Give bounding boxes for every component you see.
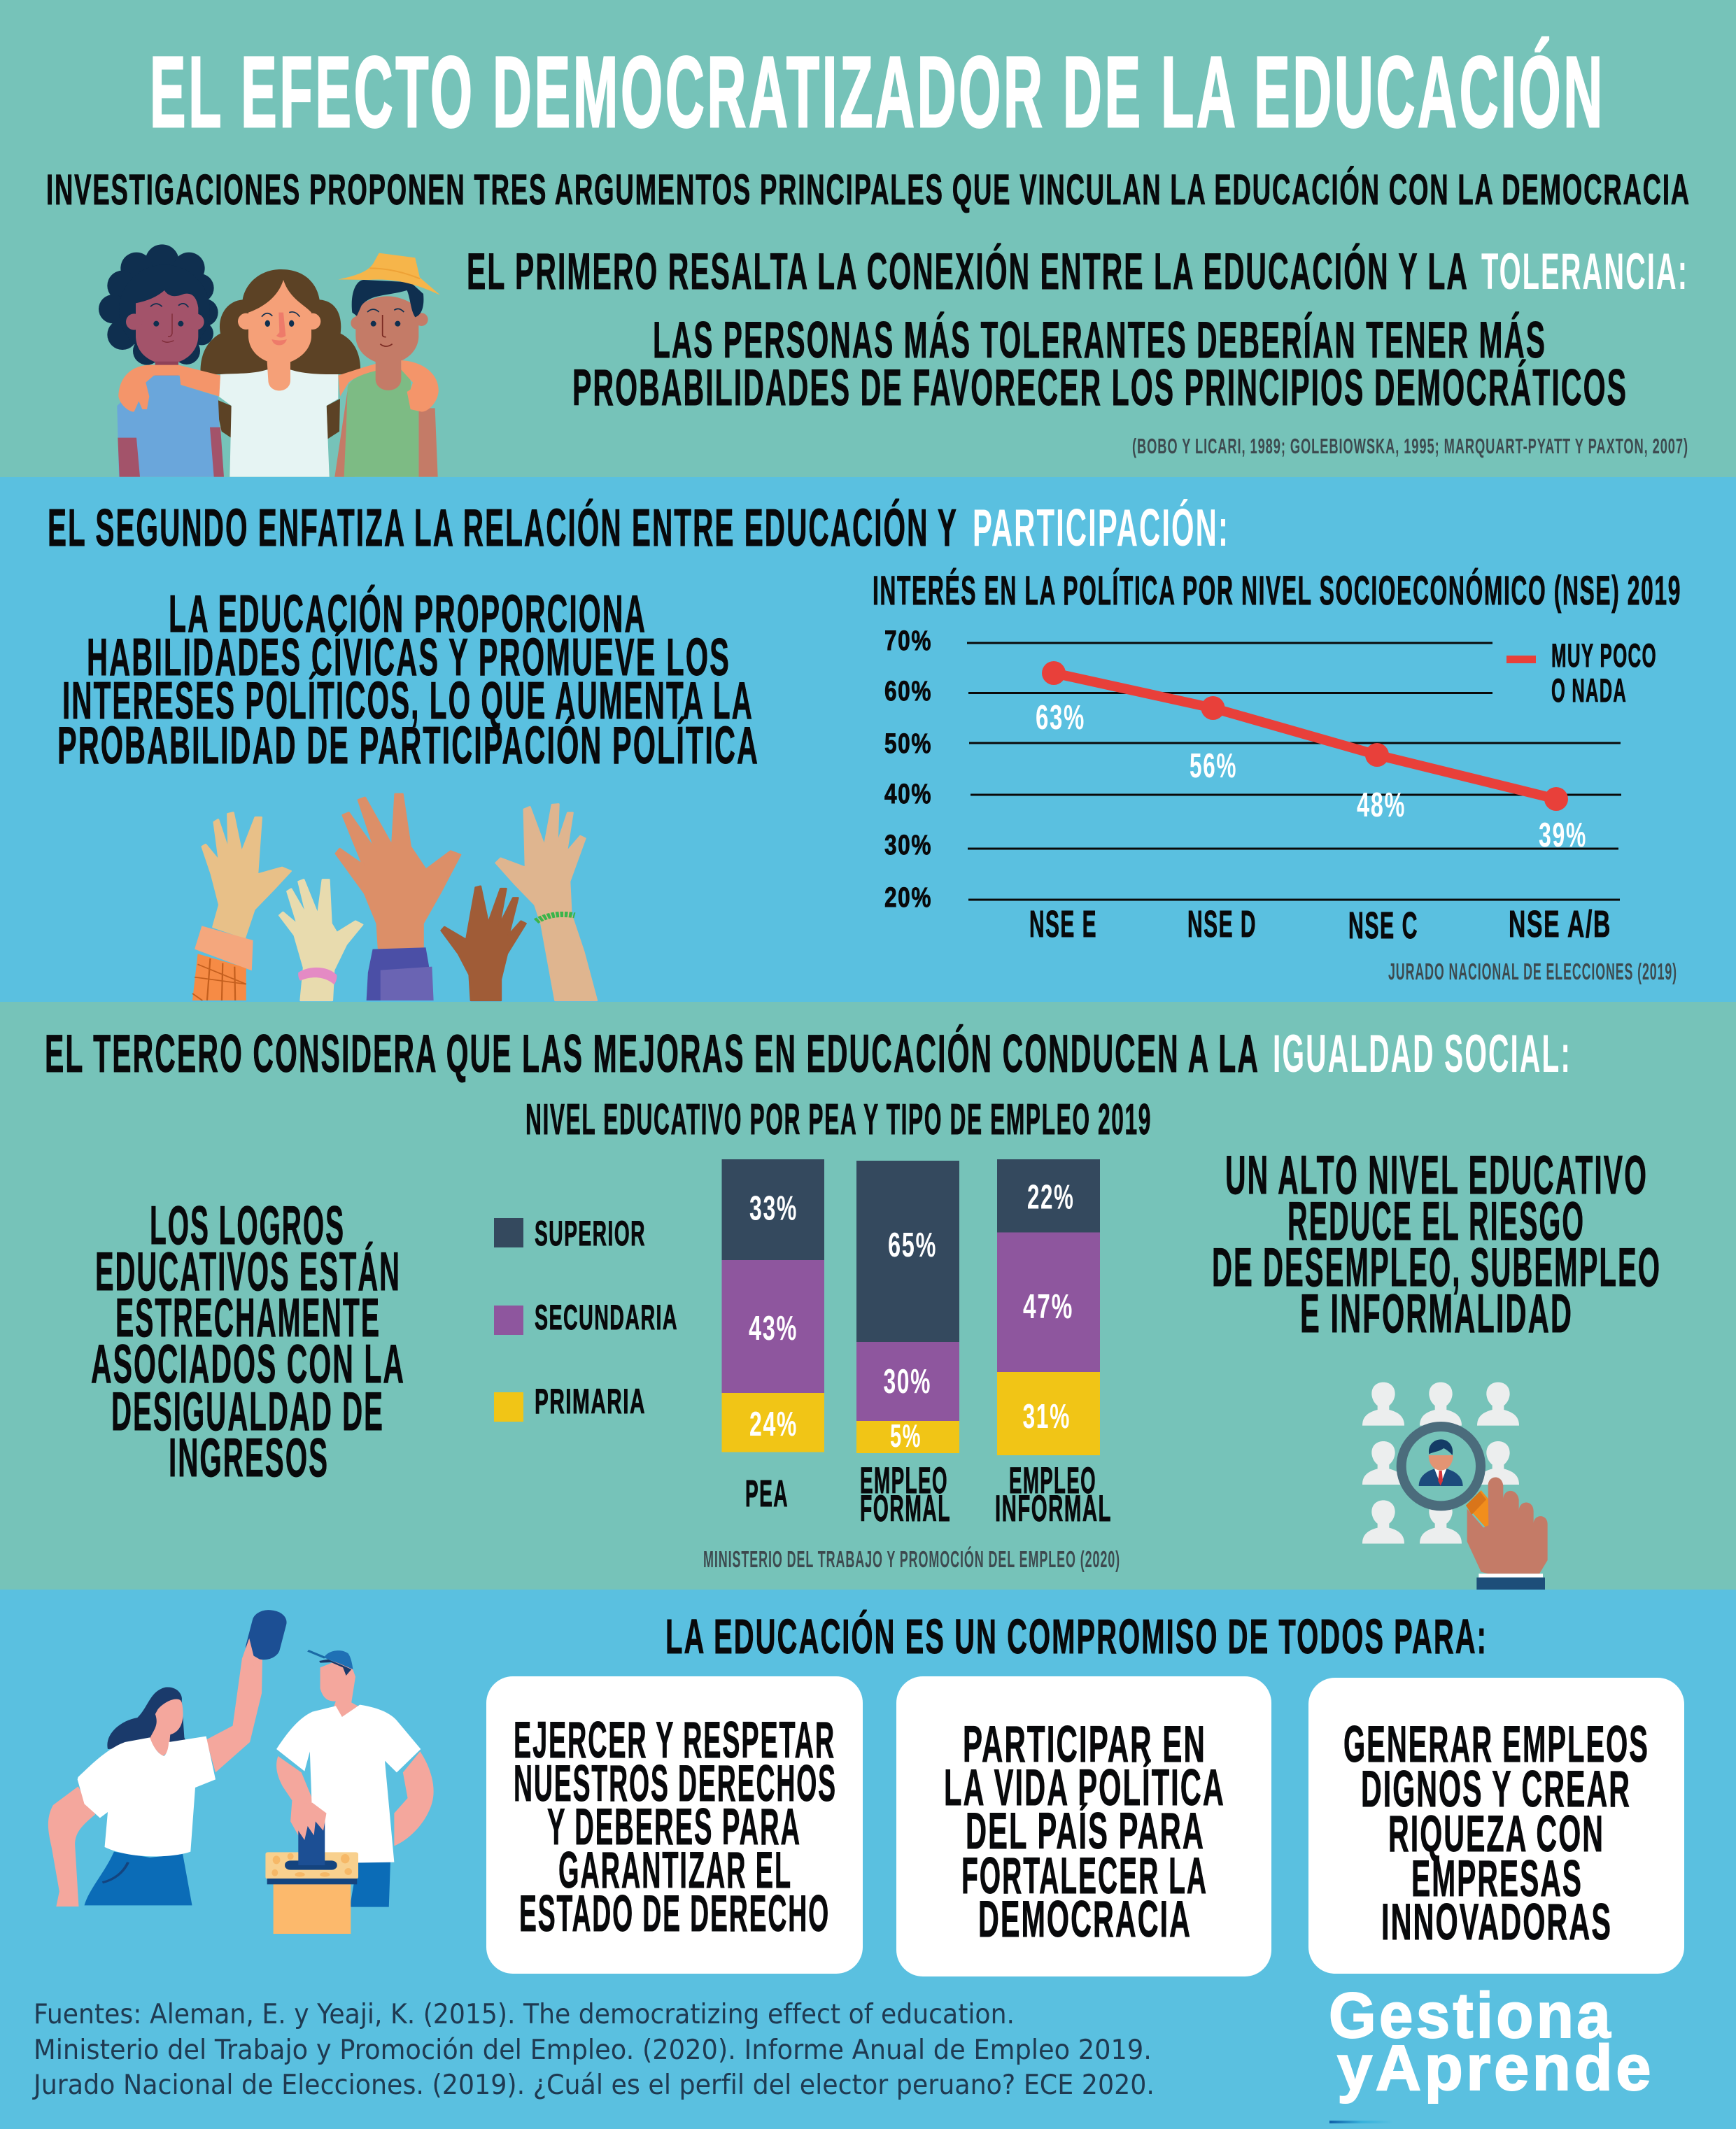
text block: civic skills: LA EDUCACIÓN PROPORCIONA [169, 584, 647, 643]
text block: income inequality: ASOCIADOS CON LA [91, 1333, 405, 1394]
card: political life [896, 1676, 1271, 1976]
illustration: raised hands [192, 794, 597, 1000]
section heading: second argument, participation: PARTICIPACIÓN: [973, 498, 1229, 557]
chart source: MINISTERIO DEL TRABAJO Y PROMOCIÓN DEL EMPLEO (2020) [703, 1546, 1120, 1572]
data labels: 48% [1357, 786, 1406, 824]
section heading: second argument, participation: EL SEGUNDO ENFATIZA LA RELACIÓN ENTRE EDUCACIÓN Y [48, 498, 958, 557]
man [350, 1861, 390, 1907]
card: rights and duties: NUESTROS DERECHOS [514, 1755, 837, 1812]
stacked bar chart [722, 1159, 1112, 1529]
woman [107, 1688, 187, 1749]
x axis labels: NSE D [1187, 903, 1257, 945]
y axis labels: 50% [884, 728, 932, 759]
bar: empleo formal: 30% [883, 1363, 931, 1401]
x axis labels: NSE E [1029, 903, 1097, 945]
legend: education levels: SUPERIOR [535, 1214, 646, 1253]
sources [31, 1999, 1155, 2101]
y axis labels: 40% [884, 779, 932, 809]
text block: civic skills: HABILIDADES CÍVICAS Y PROMUEVE LOS [87, 628, 731, 686]
text block: tolerance [572, 312, 1628, 416]
bar: PEA [722, 1159, 824, 1452]
text block: income inequality: INGRESOS [169, 1427, 329, 1488]
bar labels: INFORMAL [995, 1488, 1112, 1529]
card: political life: FORTALECER LA [961, 1848, 1208, 1904]
bar: empleo formal: 5% [890, 1417, 922, 1454]
bar labels [745, 1460, 1112, 1529]
x axis labels: NSE A/B [1509, 903, 1611, 945]
ballot box [274, 1884, 351, 1934]
legend: O NADA [1551, 672, 1627, 709]
bar: empleo informal [997, 1159, 1100, 1455]
y axis labels: 20% [884, 882, 932, 913]
panel: commitment background [0, 1590, 1736, 2129]
text block: income inequality: LOS LOGROS [150, 1194, 345, 1256]
sources: Ministerio del Trabajo y Promoción del Empleo. (2020). Informe Anual de Empleo 2019. [34, 2035, 1152, 2066]
text block: income inequality: ESTRECHAMENTE [115, 1287, 381, 1348]
card: rights and duties: EJERCER Y RESPETAR [514, 1712, 835, 1769]
chart title: education by employment: NIVEL EDUCATIVO POR PEA Y TIPO DE EMPLEO 2019 [525, 1096, 1152, 1144]
sources: Jurado Nacional de Elecciones. (2019). ¿Cuál es el perfil del elector peruano? ECE 2020. [31, 2070, 1155, 2101]
logo [1329, 1980, 1654, 2123]
text block: civic skills: PROBABILIDAD DE PARTICIPACIÓN POLÍTICA [57, 716, 759, 774]
bar: empleo formal: 65% [888, 1226, 937, 1264]
x axis labels: NSE C [1348, 905, 1418, 947]
bar labels: EMPLEO [1009, 1460, 1096, 1501]
legend [1506, 637, 1657, 709]
bar: PEA: 43% [749, 1310, 798, 1348]
bar: empleo formal [856, 1161, 959, 1454]
data labels: 56% [1190, 747, 1237, 785]
text block: income inequality [91, 1194, 405, 1488]
woman [118, 280, 439, 477]
legend: education levels: PRIMARIA [535, 1382, 646, 1421]
card: rights and duties [486, 1676, 863, 1974]
y axis labels [884, 625, 932, 913]
illustration: three friends [99, 244, 440, 477]
bar labels: EMPLEO [860, 1460, 948, 1501]
line chart: political interest by NSE [873, 568, 1681, 984]
text block: income inequality: EDUCATIVOS ESTÁN [95, 1240, 401, 1302]
card: decent jobs: EMPRESAS [1411, 1851, 1583, 1907]
panel: equality background [0, 1002, 1736, 1590]
bar labels: PEA [745, 1473, 789, 1515]
card: rights and duties: ESTADO DE DERECHO [519, 1886, 830, 1942]
left friend [99, 244, 224, 477]
bar: empleo informal: 22% [1027, 1178, 1075, 1216]
right friend [334, 253, 440, 477]
data labels: 39% [1539, 816, 1587, 854]
text block: income inequality: DESIGUALDAD DE [111, 1380, 384, 1442]
data line [1042, 661, 1568, 811]
text block: civic skills: INTERESES POLÍTICOS, LO QUE AUMENTA LA [62, 671, 754, 730]
y axis labels: 60% [884, 676, 932, 707]
panel: tolerance background [0, 0, 1736, 477]
bar: empleo informal: 31% [1023, 1398, 1071, 1436]
card: rights and duties: GARANTIZAR EL [558, 1842, 792, 1899]
bar: PEA: 24% [749, 1406, 798, 1443]
bar: empleo informal: 47% [1023, 1288, 1073, 1326]
card: political life: LA VIDA POLÍTICA [944, 1760, 1225, 1816]
logo: Gestiona [1329, 1980, 1614, 2051]
card: rights and duties: Y DEBERES PARA [547, 1799, 801, 1855]
bar: PEA: 33% [749, 1189, 798, 1227]
bar labels: FORMAL [860, 1488, 951, 1529]
illustration: two voters [48, 1608, 434, 1934]
icon: magnifier selecting a candidate [1362, 1382, 1548, 1590]
y axis labels: 70% [884, 625, 932, 656]
text block: unemployment risk [1212, 1144, 1661, 1344]
card: political life: DEL PAÍS PARA [966, 1803, 1205, 1860]
logo: yAprende [1337, 2032, 1654, 2104]
data labels: 63% [1036, 699, 1085, 737]
sources: Fuentes: Aleman, E. y Yeaji, K. (2015). The democratizing effect of education. [34, 1999, 1015, 2030]
woman's hair [201, 269, 360, 374]
data labels [1036, 699, 1587, 854]
text block: civic skills [57, 584, 759, 774]
x axis labels [1029, 903, 1611, 947]
legend: education levels: SECUNDARIA [535, 1298, 678, 1337]
panel: participation background [0, 477, 1736, 1002]
card: political life: PARTICIPAR EN [963, 1716, 1206, 1773]
card: political life: DEMOCRACIA [978, 1891, 1192, 1948]
card: decent jobs [1308, 1678, 1684, 1974]
y axis labels: 30% [884, 830, 932, 861]
legend: education levels [494, 1214, 678, 1422]
